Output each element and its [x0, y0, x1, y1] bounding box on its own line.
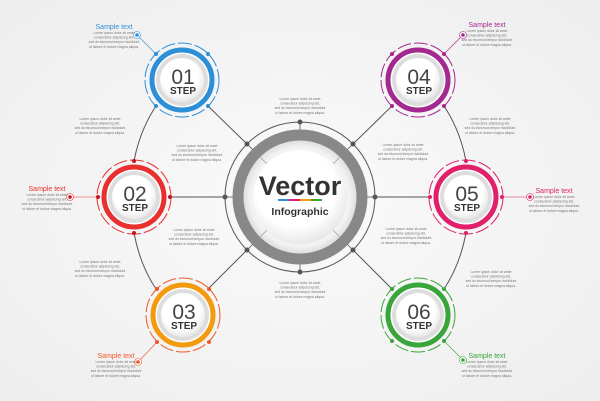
- callout 04: Sample text: [469, 22, 506, 29]
- step 05: 05: [455, 183, 479, 206]
- step 04: 04: [407, 66, 431, 89]
- callout 05: Sample text: [536, 188, 573, 195]
- step 06: STEP: [406, 321, 432, 332]
- step 01: STEP: [170, 86, 196, 97]
- step 05: [428, 159, 504, 235]
- step 02: [96, 159, 172, 235]
- title: Vector: [259, 171, 342, 201]
- callout 05: [502, 188, 579, 213]
- step 01: [145, 43, 219, 117]
- connectors: [134, 106, 466, 289]
- step 04: [381, 43, 455, 117]
- callout 01: Sample text: [96, 24, 133, 31]
- lorem text blocks: [75, 97, 516, 299]
- step 02: STEP: [122, 203, 148, 214]
- callout 02: Sample text: [29, 186, 66, 193]
- step 02: 02: [123, 183, 147, 206]
- callout 04: [444, 22, 512, 54]
- callout 03: Sample text: [98, 353, 135, 360]
- step 03: STEP: [171, 321, 197, 332]
- step 03: 03: [172, 301, 196, 324]
- subtitle: Infographic: [271, 206, 329, 218]
- step 06: [381, 278, 455, 352]
- callout 02: [22, 186, 98, 211]
- step 01: 01: [171, 66, 195, 89]
- callout 01: [89, 24, 156, 54]
- step 03: [146, 278, 220, 352]
- step 05: STEP: [454, 203, 480, 214]
- center hub: [222, 120, 378, 274]
- callout 06: Sample text: [469, 353, 506, 360]
- callout 03: [91, 342, 157, 378]
- callout 06: [444, 341, 512, 378]
- step 04: STEP: [406, 86, 432, 97]
- step 06: 06: [407, 301, 431, 324]
